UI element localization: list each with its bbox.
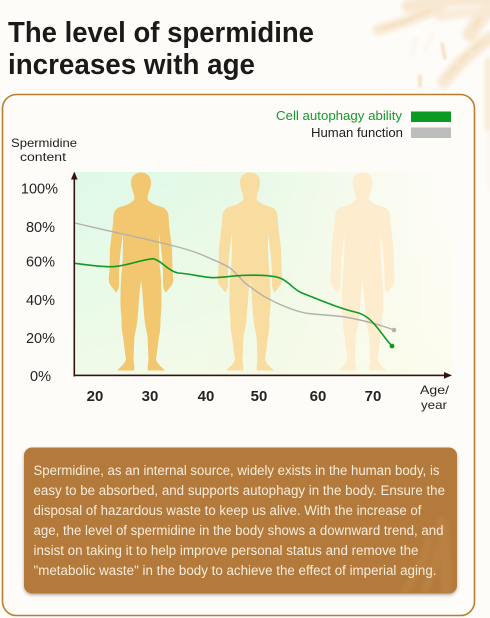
y axis title (11, 136, 77, 164)
x axis labels (87, 388, 381, 405)
description text (34, 463, 445, 578)
y axis title: Spermidine (11, 136, 77, 150)
description text: easy to be absorbed, and supports autophagy in the body. Ensure the (34, 483, 445, 498)
title: increases with age (8, 49, 255, 81)
x axis title: year (421, 398, 447, 412)
x axis labels: 40 (198, 388, 214, 405)
legend: Cell autophagy ability (276, 108, 403, 123)
title (8, 17, 314, 81)
y axis labels: 0% (30, 369, 51, 385)
legend: Human function (311, 125, 403, 140)
legend (276, 108, 451, 140)
x axis title: Age/ (420, 383, 450, 397)
x axis labels: 70 (365, 388, 381, 405)
y axis title: content (20, 150, 67, 164)
x axis labels: 20 (87, 388, 103, 405)
y axis labels: 60% (26, 254, 55, 270)
figures: three human silhouettes (109, 172, 395, 370)
axes (71, 172, 452, 379)
description text: Spermidine, as an internal source, widely exists in the human body, is (34, 463, 440, 478)
description text: disposal of hazardous waste to keep us alive. With the increase of (34, 503, 422, 518)
x axis labels: 30 (142, 388, 158, 405)
decoration: wheat in box (450, 593, 452, 594)
description text: "metabolic waste" in the body to achieve the effect of imperial aging. (34, 563, 436, 578)
title: The level of spermidine (8, 17, 314, 49)
y axis labels: 100% (21, 182, 58, 198)
line: human function (75, 223, 396, 332)
decoration: wheat top right (378, 0, 490, 190)
line: cell autophagy ability (75, 259, 394, 348)
y axis labels: 40% (26, 293, 55, 309)
description text: insist on taking it to help improve personal status and remove the (34, 543, 418, 558)
description text: age, the level of spermidine in the body shows a downward trend, and (34, 523, 444, 538)
y axis labels (21, 182, 58, 385)
x axis labels: 50 (251, 388, 267, 405)
chart background (75, 172, 452, 375)
y axis labels: 20% (26, 331, 55, 347)
description box (24, 448, 457, 594)
x axis title (420, 383, 450, 412)
x axis labels: 60 (310, 388, 326, 405)
y axis labels: 80% (26, 220, 55, 236)
